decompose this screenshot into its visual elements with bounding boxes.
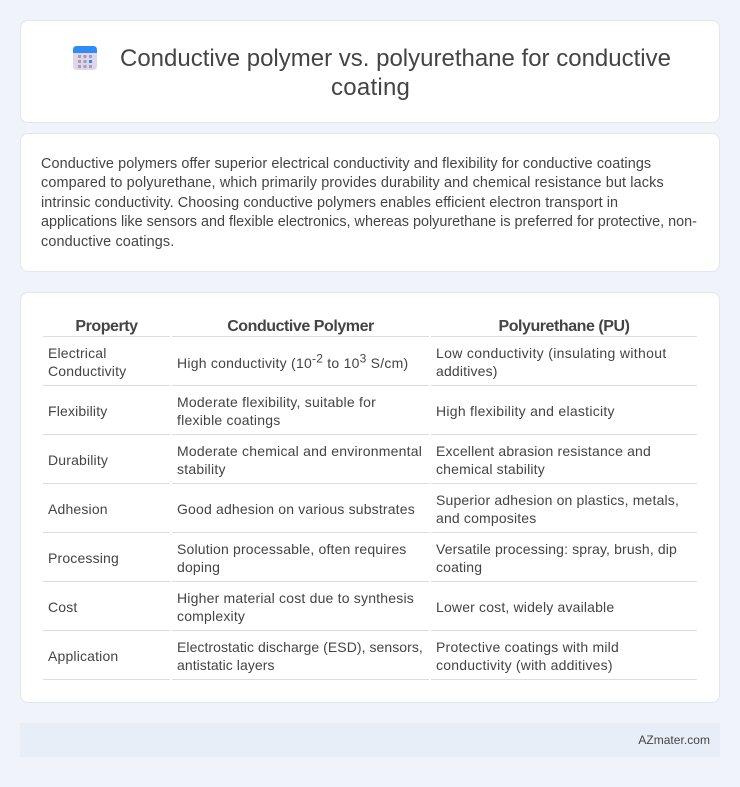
row: cost: Cost	[48, 599, 77, 615]
row: flexibility: Moderate flexibility, suitable for	[177, 394, 376, 410]
row: electrical conductivity: additives)	[436, 363, 498, 379]
summary text	[41, 156, 697, 250]
row: application: antistatic layers	[177, 657, 275, 673]
row: durability: chemical stability	[436, 461, 545, 477]
row: electrical conductivity: Conductivity	[48, 363, 126, 379]
row: electrical conductivity: Low conductivity (insulating without	[436, 345, 667, 361]
row: flexibility: High flexibility and elasticity	[436, 403, 615, 419]
row: application: Protective coatings with mild	[436, 639, 619, 655]
row: durability	[43, 443, 697, 484]
row: application: Electrostatic discharge (ESD), sensors,	[177, 639, 423, 655]
row: processing: Processing	[48, 550, 119, 566]
icon: calendar	[73, 46, 97, 70]
row: durability: Moderate chemical and environmental	[177, 443, 422, 459]
header row: Polyurethane (PU)	[498, 318, 630, 335]
row: application: conductivity (with additives)	[436, 657, 613, 673]
summary text: conductive coatings.	[41, 234, 174, 250]
header row	[43, 318, 697, 337]
title: coating	[331, 74, 410, 101]
comparison table	[43, 318, 697, 680]
footer source text: AZmater.com	[638, 733, 710, 747]
row: durability: stability	[177, 461, 226, 477]
row: durability: Excellent abrasion resistance and	[436, 443, 651, 459]
row: flexibility: Flexibility	[48, 403, 107, 419]
row: cost	[43, 590, 697, 631]
row: flexibility: flexible coatings	[177, 412, 281, 428]
row: cost: Higher material cost due to synthesis	[177, 590, 414, 606]
row: electrical conductivity: Electrical	[48, 345, 106, 361]
row: adhesion: and composites	[436, 510, 536, 526]
panel: summary card	[20, 133, 720, 272]
row: processing: Versatile processing: spray, brush, dip	[436, 541, 677, 557]
footer bar	[20, 723, 720, 757]
row: processing: coating	[436, 559, 482, 575]
summary text: compared to polyurethane, which primarily provides durability and chemical resistance but lacks	[41, 175, 664, 191]
panel: title card	[20, 20, 720, 123]
row: cost: Lower cost, widely available	[436, 599, 614, 615]
header row: Conductive Polymer	[227, 318, 374, 335]
row: application	[43, 639, 697, 680]
row: processing	[43, 541, 697, 582]
row: application: Application	[48, 648, 118, 664]
row: cost: complexity	[177, 608, 245, 624]
summary text: applications like sensors and flexible electronics, whereas polyurethane is preferred for protective, non-	[41, 214, 697, 230]
title: Conductive polymer vs. polyurethane for conductive	[120, 45, 671, 72]
header row: Property	[75, 318, 138, 335]
row: adhesion: Adhesion	[48, 501, 108, 517]
panel: comparison table card	[20, 292, 720, 703]
row: durability: Durability	[48, 452, 108, 468]
summary text: intrinsic conductivity. Choosing conductive polymers enables efficient electron transport in	[41, 195, 618, 211]
row: electrical conductivity	[43, 345, 697, 386]
row: adhesion	[43, 492, 697, 533]
row: flexibility	[43, 394, 697, 435]
row: processing: doping	[177, 559, 220, 575]
row: adhesion: Superior adhesion on plastics, metals,	[436, 492, 679, 508]
row: processing: Solution processable, often requires	[177, 541, 406, 557]
row: electrical conductivity: High conductivity (10-2 to 103 S/cm)	[177, 351, 408, 371]
title	[120, 45, 671, 101]
summary text: Conductive polymers offer superior electrical conductivity and flexibility for conductive coatings	[41, 156, 651, 172]
row: adhesion: Good adhesion on various substrates	[177, 501, 415, 517]
